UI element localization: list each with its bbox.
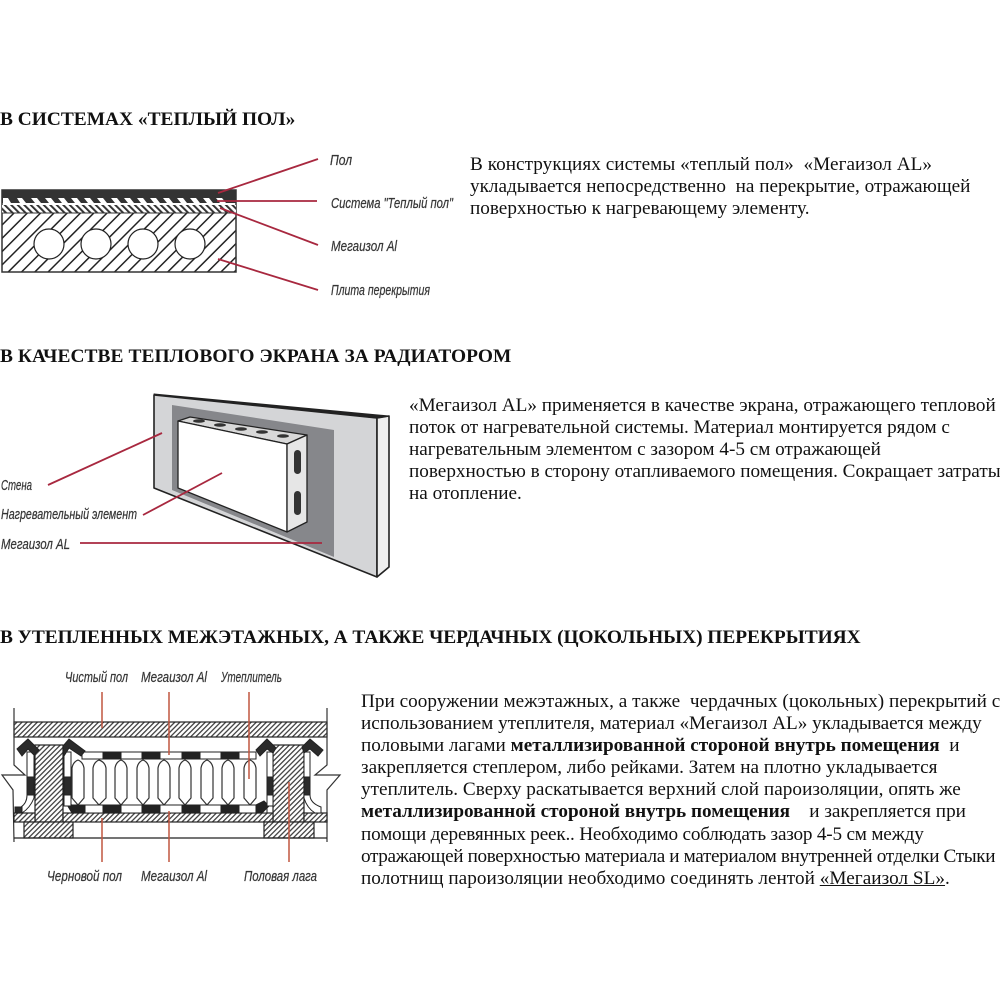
text: radiator description: поток от нагревательной системы. Материал монтируется рядом с xyxy=(409,417,950,438)
labels: Стена xyxy=(1,477,32,494)
leader lines xyxy=(102,692,289,862)
text: radiator description: «Мегаизол AL» применяется в качестве экрана, отражающего тепловой xyxy=(409,395,996,416)
text: radiator description: поверхностью в сторону отапливаемого помещения. Сокращает затраты xyxy=(409,461,1000,482)
labels: Половая лага xyxy=(244,868,317,885)
heading: interfloor ceilings: В УТЕПЛЕННЫХ МЕЖЭТАЖНЫХ, А ТАКЖЕ ЧЕРДАЧНЫХ (ЦОКОЛЬНЫХ) ПЕРЕКРЫТИЯХ xyxy=(0,627,861,648)
heading: radiator screen: В КАЧЕСТВЕ ТЕПЛОВОГО ЭКРАНА ЗА РАДИАТОРОМ xyxy=(0,346,511,367)
reflective screen xyxy=(172,405,334,557)
text: warm floor description xyxy=(470,154,970,219)
text: floor description: помощи деревянных реек.. Необходимо соблюдать зазор 4-5 см между xyxy=(361,824,924,845)
text: floor description: закрепляется степлером, либо рейками. Затем на плотно укладывается xyxy=(361,757,937,778)
text: warm floor description: укладывается непосредственно на перекрытие, отражающей xyxy=(470,176,970,197)
insulation layer xyxy=(2,205,236,213)
layer labels xyxy=(330,152,454,299)
vapor barrier, upper xyxy=(82,752,256,759)
diagram: floor cross-section xyxy=(0,669,342,885)
text: floor description: полотнищ пароизоляции необходимо соединять лентой «Мегаизол SL». xyxy=(361,868,950,889)
labels: Мегаизол Al xyxy=(141,669,208,686)
labels: Утеплитель xyxy=(220,669,282,686)
vapor barrier, lower xyxy=(66,801,269,813)
heating system layer xyxy=(3,198,226,203)
finished floor board xyxy=(14,722,327,737)
text: warm floor description: поверхностью к нагревающему элементу. xyxy=(470,198,810,219)
wall xyxy=(154,394,389,577)
leader lines xyxy=(217,159,318,290)
text: floor description: использованием утеплителя, материал «Мегаизол AL» укладывается между xyxy=(361,713,982,734)
text: floor description: половыми лагами металлизированной стороной внутрь помещения и xyxy=(361,735,960,756)
labels: Мегаизол AL xyxy=(1,536,70,553)
text: floor description: отражающей поверхностью материала и материалом внутренней отделки Стыки xyxy=(361,846,995,867)
text: warm floor description: В конструкциях системы «теплый пол» «Мегаизол AL» xyxy=(470,154,932,175)
layer labels: Пол xyxy=(330,152,352,169)
leader lines xyxy=(48,433,322,543)
layer labels: Мегаизол Al xyxy=(331,238,398,255)
floor covering layer xyxy=(2,190,236,203)
text: floor description xyxy=(361,691,1000,889)
text: radiator description: на отопление. xyxy=(409,483,522,504)
labels xyxy=(47,669,317,885)
labels: Черновой пол xyxy=(47,868,122,885)
walls with notches xyxy=(2,708,340,842)
heading: warm floor: В СИСТЕМАХ «ТЕПЛЫЙ ПОЛ» xyxy=(0,109,295,130)
diagram: warm floor layers xyxy=(1,152,454,299)
radiator xyxy=(178,417,307,532)
text: floor description: металлизированной стороной внутрь помещения и закрепляется при xyxy=(361,801,966,822)
text: floor description: При сооружении межэтажных, а также чердачных (цокольных) перекрытий с xyxy=(361,691,1000,712)
labels xyxy=(1,477,137,553)
diagram: radiator heat screen xyxy=(1,394,390,578)
text: radiator description: нагревательным элементом с зазором 4-5 см отражающей xyxy=(409,439,881,460)
labels: Чистый пол xyxy=(65,669,128,686)
vapor barrier side wraps with arrow tips xyxy=(15,739,323,813)
labels: Нагревательный элемент xyxy=(1,506,137,523)
text: radiator description xyxy=(409,395,1000,504)
labels: Мегаизол Al xyxy=(141,868,208,885)
joists xyxy=(35,745,304,822)
insulation pleats xyxy=(72,760,256,805)
concrete slab with hollows xyxy=(2,190,236,272)
subfloor and battens xyxy=(14,813,327,838)
text: floor description: утеплитель. Сверху раскатывается верхний слой пароизоляции, опять же xyxy=(361,779,961,800)
